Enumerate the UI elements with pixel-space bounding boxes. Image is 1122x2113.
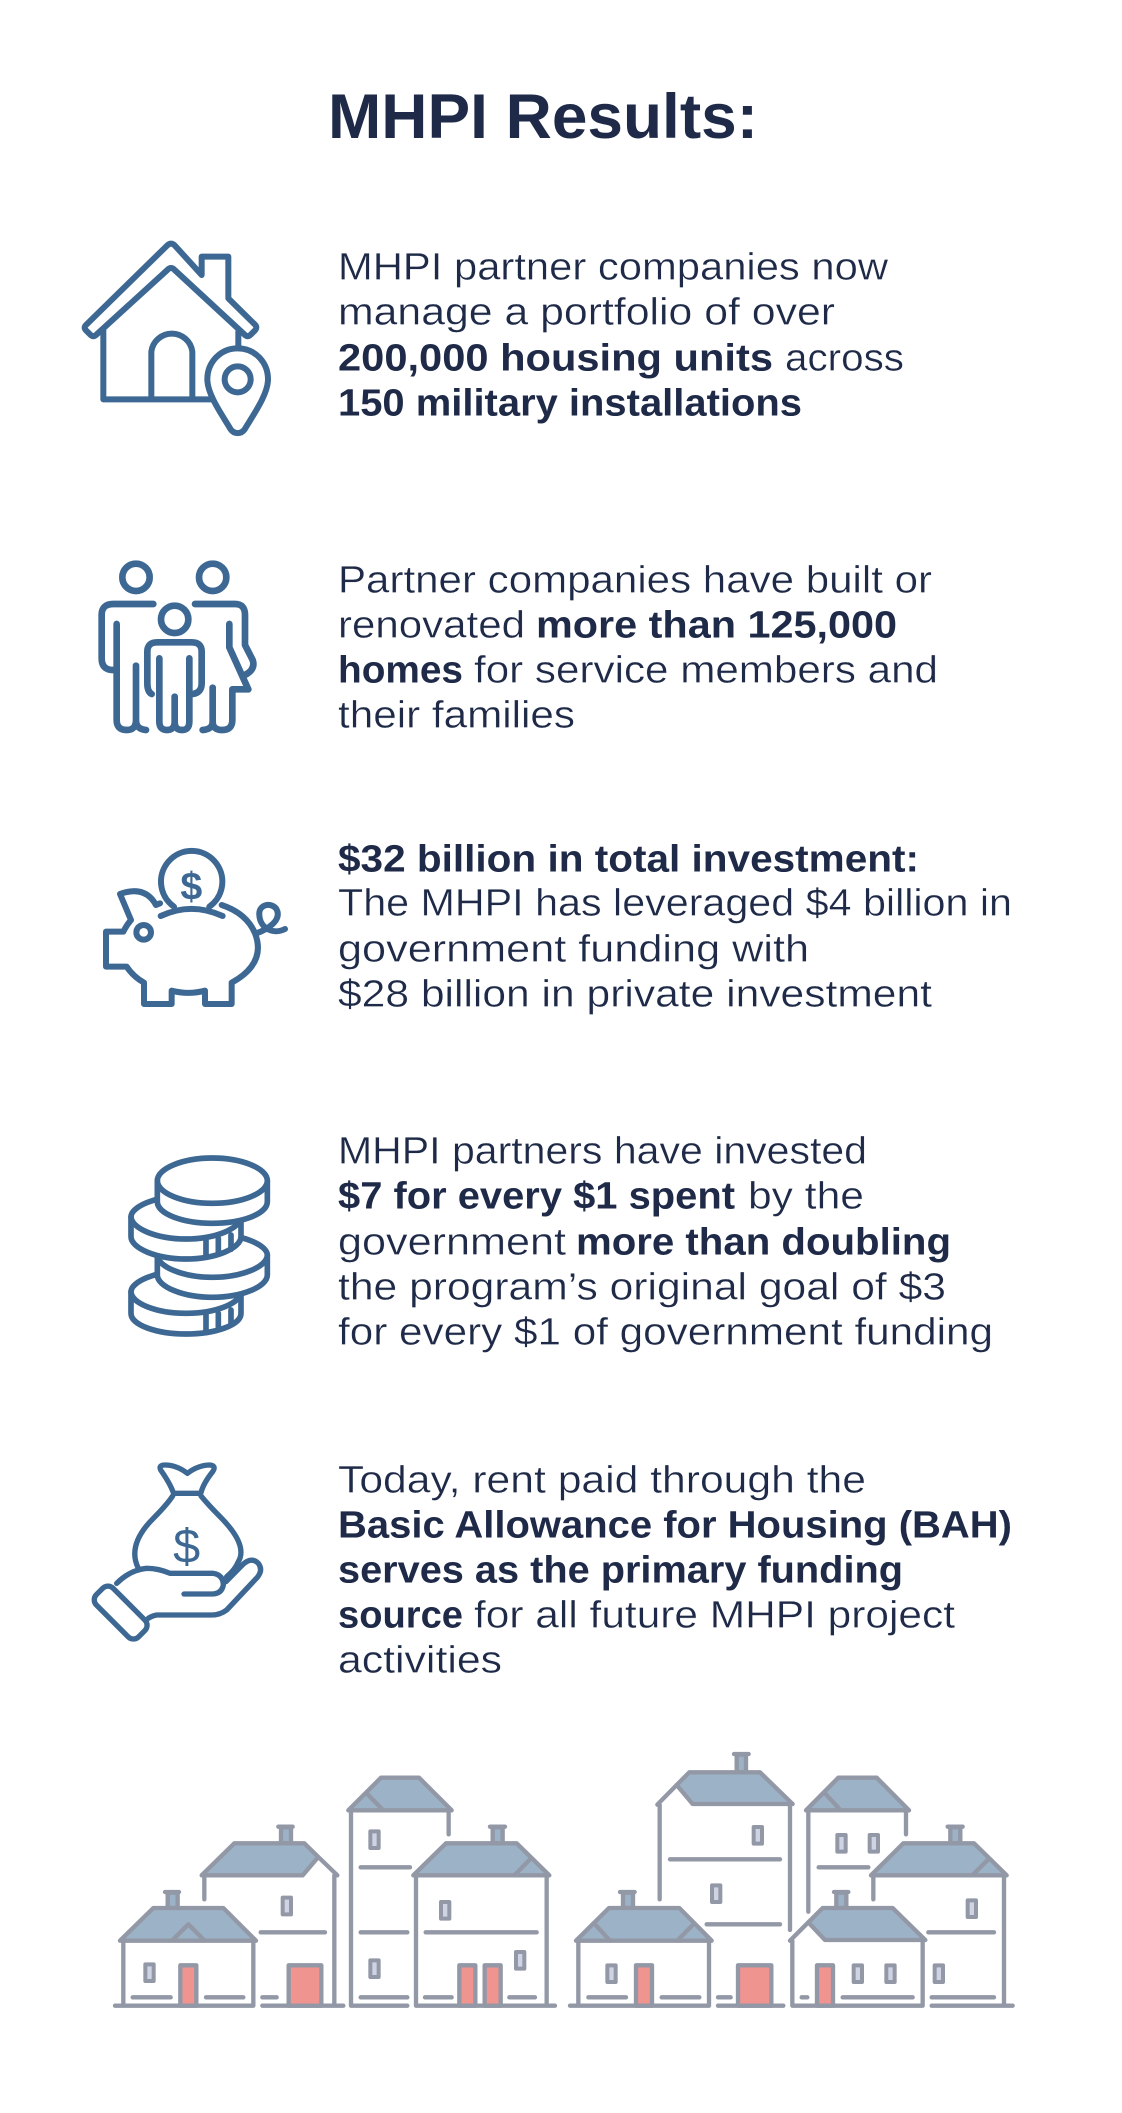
panel: private investment ratio [131,1130,993,1354]
text: homes built or renovated: homes [338,650,463,692]
house: right [871,1827,1013,2006]
text: basic allowance for housing: activities [338,1640,502,1682]
house: tower [348,1778,452,2006]
icon: hand holding money bag [91,1465,261,1642]
title: MHPI Results: [328,82,758,152]
house: front middle [790,1892,925,2006]
house: back right [806,1778,909,1912]
icon: piggy bank with coin [106,851,285,1004]
text: seven dollars for every dollar: for every $1 of government funding [338,1312,993,1354]
text: seven dollars for every dollar: by the [748,1176,864,1218]
text: portfolio of housing units: 150 military installations [338,382,802,424]
text: basic allowance for housing: Basic Allowance for Housing (BAH) [338,1504,1012,1546]
house: small left [115,1892,256,2006]
panel: total investment [106,838,1012,1016]
icon: piggy bank with coin: $ [180,864,202,908]
panel: housing portfolio [85,244,904,433]
icon: house with location pin [85,244,268,433]
text: total investment [338,838,1012,1016]
text: seven dollars for every dollar: government [338,1222,566,1264]
text: homes built or renovated: Partner companies have built or [338,560,932,602]
text: seven dollars for every dollar: more than doubling [576,1222,951,1264]
panel: basic allowance for housing [91,1460,1012,1682]
text: basic allowance for housing [338,1460,1012,1682]
house: second [202,1827,343,2006]
house: double door [413,1827,555,2006]
icon: family [102,564,253,730]
text: basic allowance for housing: for all future MHPI project [474,1594,955,1636]
text: portfolio of housing units: manage a portfolio of over [338,292,835,334]
text: homes built or renovated: renovated [338,604,525,646]
text: total investment: $32 billion in total investment: [338,838,919,880]
text: homes built or renovated: for service members and [474,650,938,692]
text: seven dollars for every dollar: MHPI partners have invested [338,1130,867,1172]
text: seven dollars for every dollar: $7 for every $1 spent [338,1176,735,1218]
icon: hand holding money bag: $ [173,1520,200,1574]
text: portfolio of housing units: 200,000 housing units [338,338,773,380]
illustration: houses right group [570,1754,1013,2006]
text: basic allowance for housing: serves as the primary funding [338,1550,903,1592]
text: total investment: The MHPI has leveraged $4 billion in [338,882,1012,924]
house: front left [570,1892,712,2006]
text: homes built or renovated: more than 125,000 [536,604,897,646]
text: portfolio of housing units: across [785,338,904,380]
text: seven dollars for every dollar: the program’s original goal of $3 [338,1266,946,1308]
panel: homes built or renovated [102,560,938,736]
text: total investment: $28 billion in private investment [338,974,932,1016]
text: portfolio of housing units: MHPI partner companies now [338,246,889,288]
icon: stacked coins [131,1158,267,1334]
text: homes built or renovated [338,560,938,736]
text: basic allowance for housing: Today, rent paid through the [338,1460,866,1502]
text: portfolio of housing units [338,246,904,424]
illustration: houses left group [115,1778,555,2006]
house: tall [657,1754,793,2006]
text: seven dollars for every dollar [338,1130,993,1354]
text: basic allowance for housing: source [338,1594,463,1636]
text: total investment: government funding with [338,928,809,970]
text: homes built or renovated: their families [338,694,575,736]
